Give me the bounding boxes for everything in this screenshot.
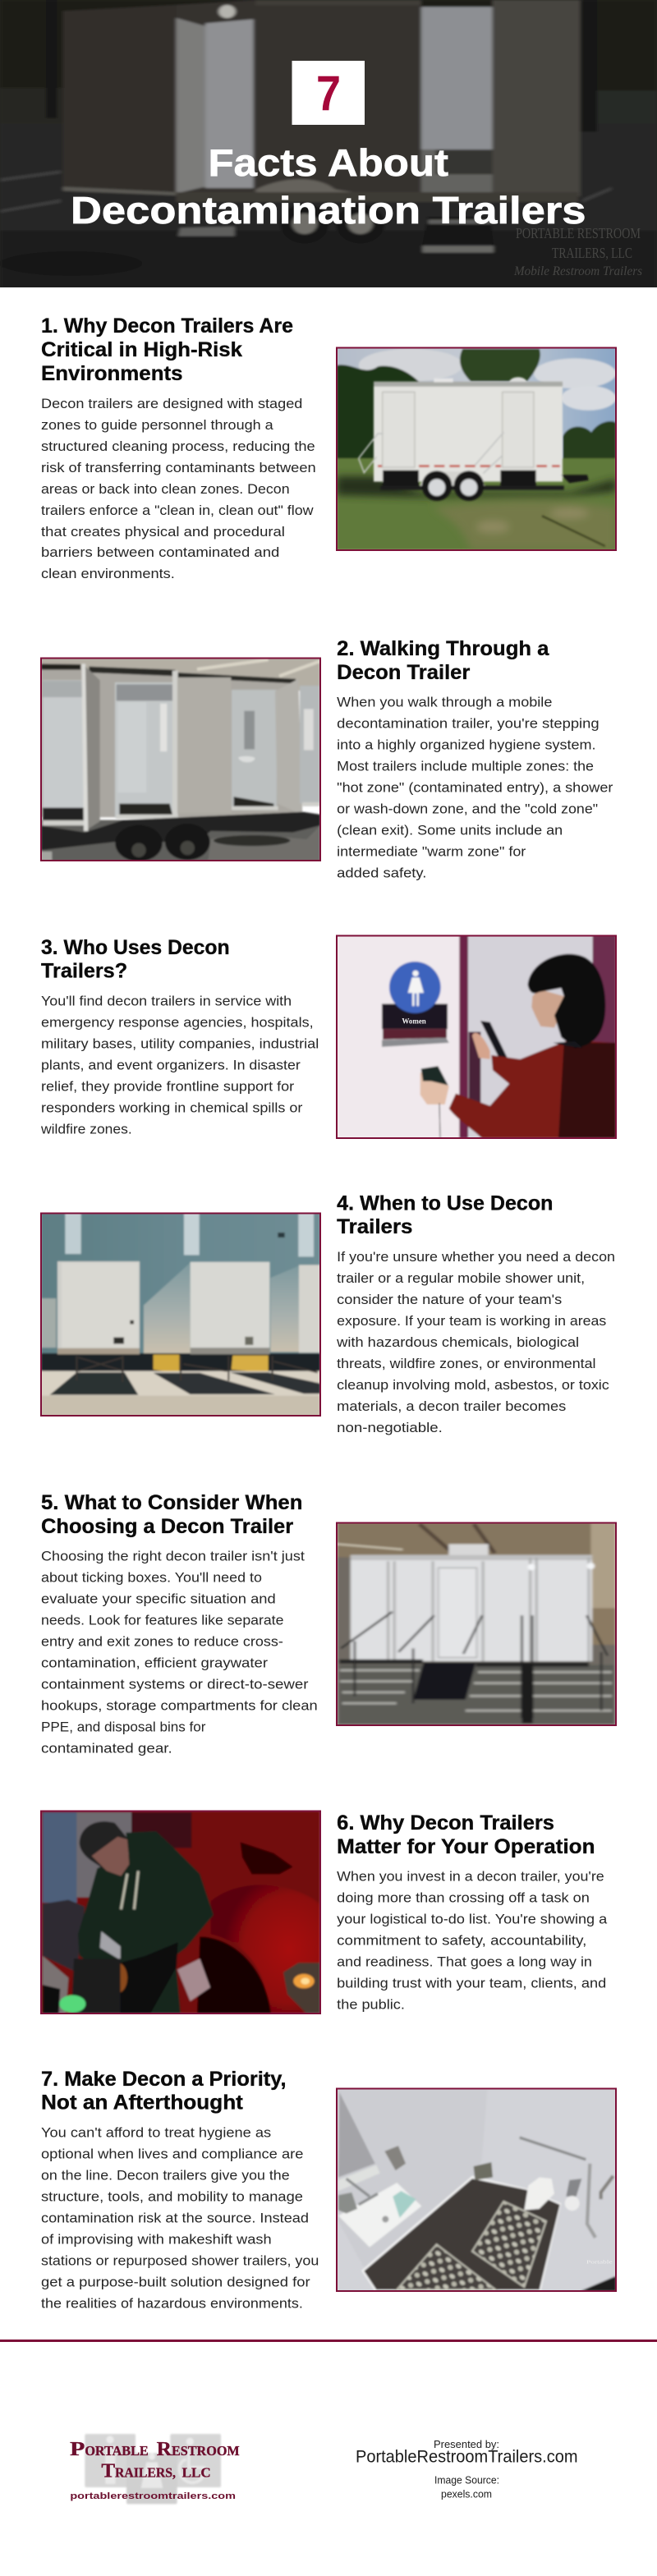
body text bbox=[336, 1250, 615, 1435]
heading bbox=[41, 315, 293, 385]
photo: restroom interior: Portable bbox=[586, 2260, 613, 2266]
body text: stations or repurposed shower trailers, you bbox=[41, 2253, 319, 2268]
body text: (clean exit). Some units include an bbox=[337, 823, 563, 838]
panel: fact 2 bbox=[41, 637, 613, 880]
body text: plants, and event organizers. In disaster bbox=[41, 1058, 301, 1072]
photo: open decon trailer doors bbox=[41, 658, 320, 861]
body text: containment systems or direct-to-sewer bbox=[41, 1678, 309, 1692]
heading: 5. What to Consider When bbox=[41, 1491, 302, 1514]
footer credits: pexels.com bbox=[441, 2488, 492, 2500]
title: Decontamination Trailers bbox=[71, 189, 586, 232]
watermark: Mobile Restroom Trailers bbox=[513, 264, 642, 278]
heading: Trailers bbox=[337, 1215, 412, 1238]
body text bbox=[40, 994, 319, 1136]
panel: hero banner bbox=[0, 0, 657, 288]
body text: decontamination trailer, you're stepping bbox=[337, 716, 600, 731]
body text: exposure. If your team is working in areas bbox=[337, 1314, 606, 1329]
body text: that creates physical and procedural bbox=[41, 525, 285, 540]
logo: ESTROOM bbox=[172, 2443, 240, 2459]
body text: the public. bbox=[337, 1997, 405, 2012]
photo: white trailer on grass bbox=[337, 347, 616, 550]
body text: contamination risk at the source. Instead bbox=[41, 2211, 309, 2225]
body text: relief, they provide frontline support for bbox=[41, 1079, 295, 1094]
body text: into a highly organized hygiene system. bbox=[337, 737, 596, 752]
heading: 4. When to Use Decon bbox=[337, 1192, 554, 1215]
heading: Not an Afterthought bbox=[41, 2091, 244, 2114]
heading: 2. Walking Through a bbox=[337, 637, 550, 660]
footer credits: Presented by: bbox=[434, 2438, 499, 2450]
body text: get a purpose-built solution designed for bbox=[41, 2275, 310, 2289]
footer credits bbox=[356, 2438, 578, 2500]
body text bbox=[41, 1550, 318, 1756]
body text: evaluate your specific situation and bbox=[41, 1592, 276, 1607]
body text: consider the nature of your team's bbox=[337, 1293, 562, 1307]
body text: risk of transferring contaminants between bbox=[41, 461, 316, 475]
photo: man working beside red truck bbox=[41, 1811, 320, 2014]
body text: materials, a decon trailer becomes bbox=[337, 1399, 566, 1414]
photo: semi trailers at loading dock bbox=[41, 1213, 320, 1417]
panel: fact 4 bbox=[41, 1192, 615, 1435]
body text bbox=[337, 1869, 608, 2012]
watermark bbox=[513, 225, 642, 278]
body text: zones to guide personnel through a bbox=[41, 418, 274, 433]
body text: areas or back into clean zones. Decon bbox=[41, 482, 290, 497]
body text: When you invest in a decon trailer, you're bbox=[337, 1869, 604, 1884]
hero photo: trailer at night bbox=[0, 0, 657, 287]
logo: portablerestroomtrailers.com bbox=[70, 2491, 236, 2501]
body text: cleanup involving mold, asbestos, or toxic bbox=[337, 1378, 609, 1393]
body text: contaminated gear. bbox=[41, 1742, 172, 1756]
heading bbox=[337, 1192, 554, 1238]
body text: threats, wildfire zones, or environmental bbox=[337, 1357, 596, 1371]
body text: structure, tools, and mobility to manage bbox=[41, 2189, 303, 2204]
panel: fact 1 bbox=[41, 315, 616, 581]
body text: of improvising with makeshift wash bbox=[41, 2232, 272, 2247]
panel: fact 3 bbox=[40, 935, 616, 1138]
photo: woman using device at restroom sign: Women bbox=[402, 1017, 426, 1025]
logo: R bbox=[157, 2439, 172, 2460]
heading: Trailers? bbox=[41, 959, 127, 982]
logo: LLC bbox=[182, 2465, 211, 2481]
body text: clean environments. bbox=[41, 567, 175, 581]
body text: on the line. Decon trailers give you the bbox=[41, 2168, 290, 2183]
heading bbox=[41, 1491, 302, 1538]
title bbox=[71, 141, 586, 232]
logo: T bbox=[101, 2460, 116, 2482]
photo: trailer with steps in warehouse bbox=[337, 1522, 616, 1725]
body text: intermediate "warm zone" for bbox=[337, 844, 526, 859]
watermark: TRAILERS, LLC bbox=[552, 245, 632, 261]
heading: Matter for Your Operation bbox=[337, 1835, 595, 1858]
heading: Decon Trailer bbox=[337, 661, 471, 684]
number badge: 7 bbox=[316, 66, 341, 121]
body text: trailers enforce a "clean in, clean out" flow bbox=[41, 503, 314, 518]
body text: When you walk through a mobile bbox=[337, 695, 552, 709]
body text: PPE, and disposal bins for bbox=[41, 1720, 206, 1735]
body text: Most trailers include multiple zones: the bbox=[337, 759, 594, 774]
panel: fact 5 bbox=[41, 1491, 616, 1756]
panel: fact 7 bbox=[41, 2068, 616, 2311]
body text: Choosing the right decon trailer isn't just bbox=[41, 1550, 305, 1564]
heading: 6. Why Decon Trailers bbox=[337, 1811, 554, 1834]
body text bbox=[41, 397, 316, 581]
body text: "hot zone" (contaminated entry), a shower bbox=[337, 780, 613, 795]
body text: and readiness. That goes a long way in bbox=[337, 1954, 592, 1969]
heading bbox=[41, 936, 230, 982]
body text: needs. Look for features like separate bbox=[41, 1614, 283, 1628]
body text: doing more than crossing off a task on bbox=[337, 1890, 590, 1905]
body text: with hazardous chemicals, biological bbox=[336, 1335, 579, 1350]
body text bbox=[41, 2125, 319, 2311]
body text: You'll find decon trailers in service with bbox=[41, 994, 292, 1008]
logo: RAILERS, bbox=[115, 2465, 176, 2481]
body text: structured cleaning process, reducing the bbox=[41, 439, 315, 454]
heading: 3. Who Uses Decon bbox=[41, 936, 230, 959]
body text: your logistical to-do list. You're showing a bbox=[337, 1912, 608, 1926]
body text bbox=[337, 695, 613, 880]
photo: restroom interior bbox=[337, 2088, 616, 2291]
heading bbox=[337, 637, 550, 684]
body text: added safety. bbox=[337, 866, 426, 880]
body text: non-negotiable. bbox=[337, 1421, 443, 1435]
body text: building trust with your team, clients, and bbox=[337, 1976, 606, 1991]
heading: 1. Why Decon Trailers Are bbox=[41, 315, 293, 337]
body text: commitment to safety, accountability, bbox=[337, 1933, 586, 1948]
body text: barriers between contaminated and bbox=[41, 545, 279, 560]
body text: hookups, storage compartments for clean bbox=[41, 1699, 318, 1714]
body text: emergency response agencies, hospitals, bbox=[41, 1015, 314, 1030]
divider bbox=[0, 2340, 657, 2342]
body text: Decon trailers are designed with staged bbox=[41, 397, 302, 411]
number badge bbox=[292, 61, 365, 125]
body text: trailer or a regular mobile shower unit, bbox=[337, 1271, 585, 1286]
footer credits: PortableRestroomTrailers.com bbox=[356, 2447, 578, 2467]
heading: Environments bbox=[41, 362, 182, 385]
body text: or wash-down zone, and the "cold zone" bbox=[337, 801, 598, 816]
heading bbox=[41, 2068, 286, 2114]
heading: Critical in High-Risk bbox=[41, 338, 242, 361]
body text: contamination, efficient graywater bbox=[41, 1656, 269, 1671]
logo bbox=[70, 2434, 240, 2504]
body text: the realities of hazardous environments. bbox=[41, 2296, 303, 2311]
panel: fact 6 bbox=[41, 1811, 608, 2014]
body text: responders working in chemical spills or bbox=[41, 1100, 303, 1115]
footer credits: Image Source: bbox=[434, 2473, 499, 2486]
heading: 7. Make Decon a Priority, bbox=[41, 2068, 286, 2091]
photo: woman using device at restroom sign bbox=[337, 935, 616, 1138]
body text: You can't afford to treat hygiene as bbox=[41, 2125, 271, 2140]
logo: ORTABLE bbox=[85, 2443, 149, 2459]
body text: If you're unsure whether you need a decon bbox=[337, 1250, 615, 1265]
body text: optional when lives and compliance are bbox=[41, 2147, 303, 2161]
body text: entry and exit zones to reduce cross- bbox=[41, 1635, 283, 1650]
logo: P bbox=[70, 2439, 85, 2460]
body text: wildfire zones. bbox=[40, 1122, 132, 1136]
body text: military bases, utility companies, industrial bbox=[41, 1036, 319, 1051]
heading: Choosing a Decon Trailer bbox=[41, 1515, 293, 1538]
body text: about ticking boxes. You'll need to bbox=[41, 1571, 262, 1586]
heading bbox=[337, 1811, 595, 1858]
title: Facts About bbox=[209, 141, 448, 184]
